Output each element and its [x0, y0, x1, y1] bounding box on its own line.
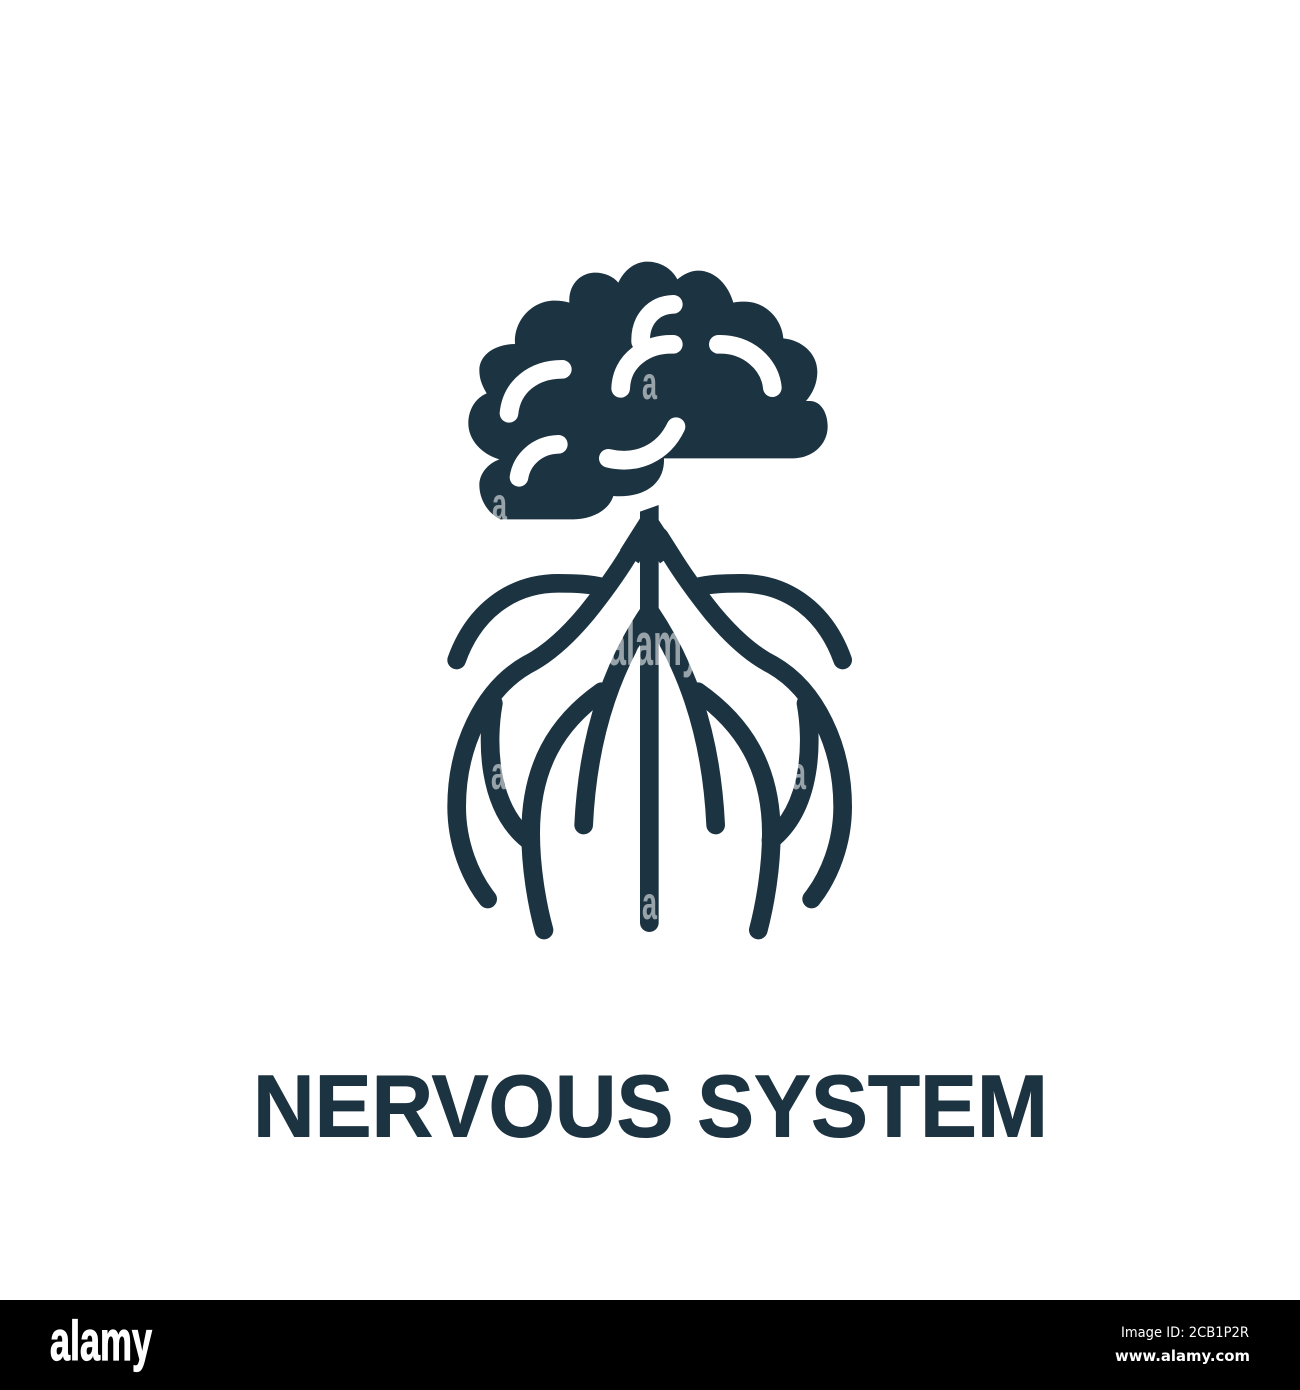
icon: brain — [468, 262, 828, 519]
watermark: a — [491, 747, 506, 799]
watermark — [491, 357, 806, 929]
watermark: a — [791, 747, 806, 799]
watermark: a — [492, 478, 507, 530]
footer logo: alamy — [50, 1309, 152, 1372]
website: www.alamy.com — [1115, 1347, 1250, 1365]
icon: nerve branches — [457, 505, 843, 930]
watermark: alamy — [608, 611, 700, 678]
watermark: a — [642, 877, 657, 929]
watermark: a — [642, 357, 657, 409]
title: NERVOUS SYSTEM — [253, 1056, 1048, 1156]
footer bar — [0, 1300, 1300, 1390]
image id: Image ID: 2CB1P2R — [1121, 1325, 1249, 1341]
